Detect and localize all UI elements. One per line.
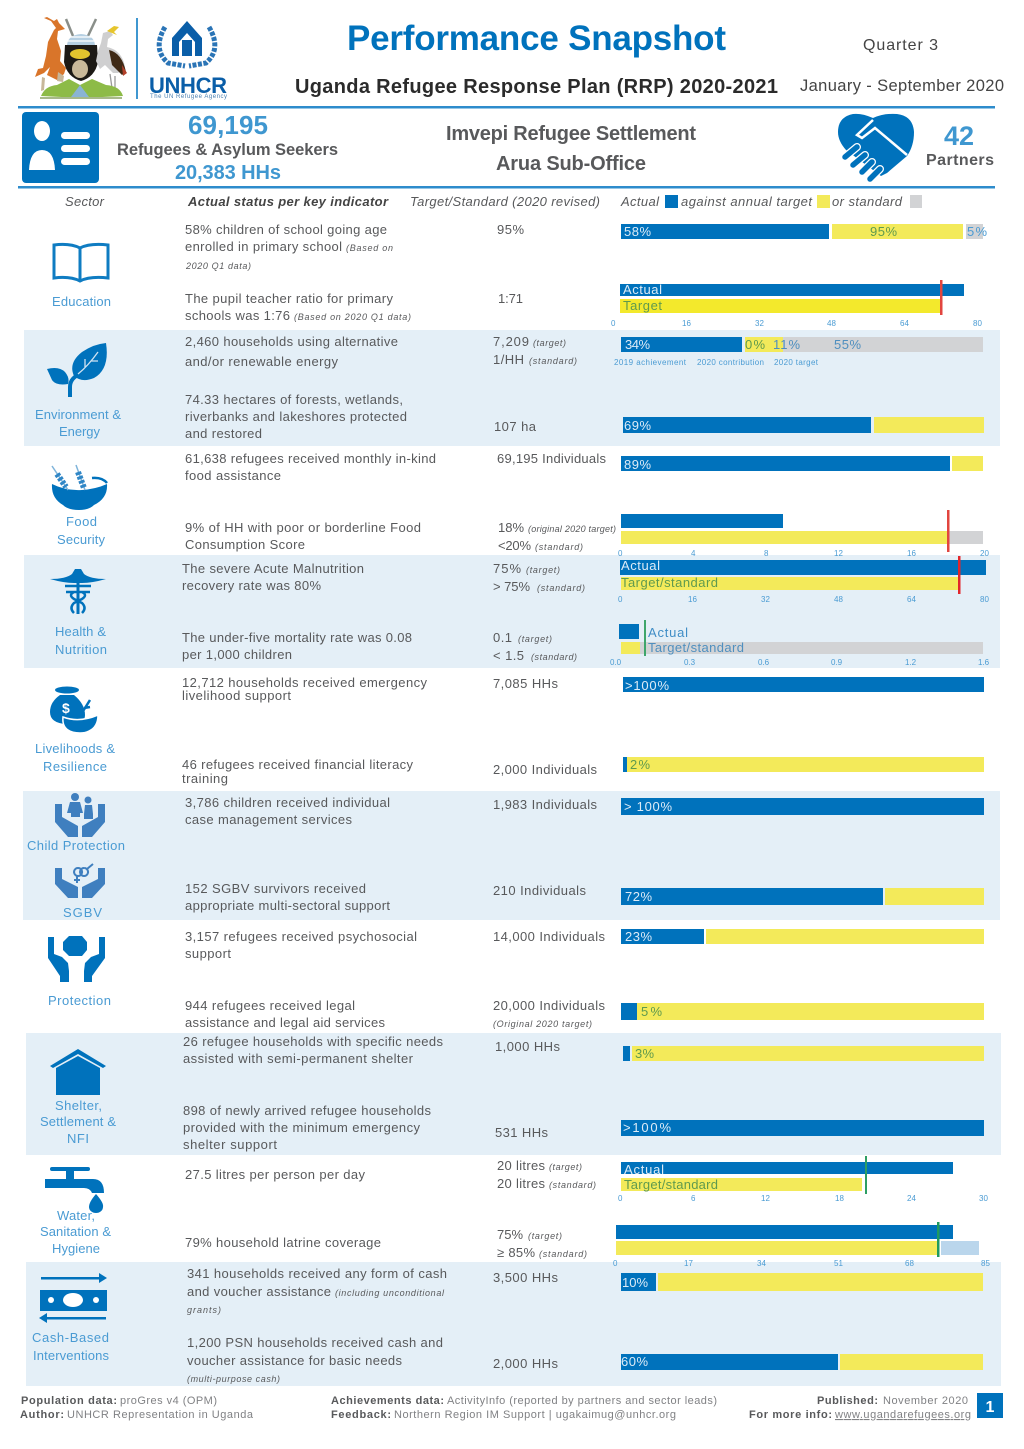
indicator: food consumption score: (original 2020 target)	[528, 524, 616, 534]
indicator: school enrolment: 5%	[967, 224, 987, 239]
indicator: semi-permanent shelter: 3%	[635, 1046, 654, 1061]
indicator: cash and voucher assistance: and voucher assistance	[187, 1284, 331, 1299]
indicator: food consumption score: 16	[907, 549, 916, 558]
indicator: school enrolment: 58%	[624, 224, 651, 239]
icon: hands with gender symbols	[55, 864, 105, 898]
icon: person card	[22, 112, 99, 183]
indicator: emergency shelter: provided with the minimum emergency	[183, 1120, 420, 1135]
indicator: legal assistance	[185, 998, 984, 1030]
indicator: pupil teacher ratio: 16	[682, 319, 691, 328]
panel: Livelihoods and Resilience	[35, 675, 984, 786]
indicator: food assistance: food assistance	[185, 468, 281, 483]
logo: UNHCR	[149, 21, 227, 100]
footer: proGres v4 (OPM)	[120, 1395, 217, 1407]
panel: Shelter, Settlement and NFI: NFI	[67, 1131, 89, 1146]
sector label: Shelter,	[55, 1098, 102, 1113]
indicator: under-five mortality: 0.9	[831, 658, 843, 667]
indicator: child case management: case management services	[185, 812, 352, 827]
indicator: semi-permanent shelter: assisted with semi-permanent shelter	[183, 1051, 414, 1066]
settlement name: Imvepi Refugee Settlement	[446, 123, 696, 145]
icon: money bag and bowl	[50, 686, 98, 733]
footer	[20, 1393, 1003, 1421]
indicator: emergency shelter: >100%	[623, 1120, 671, 1135]
indicator: financial literacy: 2%	[630, 757, 650, 772]
indicator: child case management	[185, 795, 984, 827]
indicator: food assistance: 89%	[624, 457, 651, 472]
indicator: hectares restored: riverbanks and lakeshores protected	[185, 409, 407, 424]
indicator: under-five mortality: 0.3	[684, 658, 696, 667]
sector label: Education	[52, 294, 111, 309]
indicator: latrine coverage: (target)	[528, 1231, 562, 1241]
indicator: under-five mortality: 0.1	[493, 630, 512, 645]
indicator: litres per person: 0	[618, 1194, 623, 1203]
indicator: renewable energy: (standard)	[529, 356, 577, 366]
footer: Achievements data:	[331, 1395, 444, 1407]
indicator: food consumption score: 20	[980, 549, 989, 558]
panel: Cash-Based Interventions	[26, 1262, 1001, 1386]
sector label: Cash-Based	[32, 1330, 109, 1345]
quarter: Quarter 3	[863, 37, 938, 54]
footer: Published:	[817, 1395, 878, 1407]
indicator: semi-permanent shelter: 1,000 HHs	[495, 1039, 560, 1054]
panel: Protection	[48, 929, 984, 1030]
indicator: litres per person: Target/standard	[624, 1177, 718, 1192]
indicator: child case management: > 100%	[624, 799, 672, 814]
footer: Population data:	[21, 1395, 117, 1407]
panel: Food Security	[52, 451, 989, 558]
indicator: PSN cash assistance	[187, 1335, 983, 1384]
indicator: under-five mortality: 0.0	[610, 658, 622, 667]
indicator: litres per person: 6	[691, 1194, 696, 1203]
indicator: food consumption score: 8	[764, 549, 769, 558]
indicator: pupil teacher ratio: schools was 1:76	[185, 308, 290, 323]
indicator: pupil teacher ratio: Actual	[623, 282, 662, 297]
indicator: renewable energy: (target)	[533, 338, 566, 348]
indicator: food consumption score: 18%	[498, 520, 524, 535]
indicator: hectares restored: and restored	[185, 426, 262, 441]
indicator: acute malnutrition recovery: Actual	[621, 558, 660, 573]
panel: header	[18, 17, 1004, 188]
indicator: latrine coverage: 79% household latrine coverage	[185, 1235, 381, 1250]
icon: caduceus	[50, 569, 106, 614]
indicator: acute malnutrition recovery: 32	[761, 595, 770, 604]
indicator: food assistance	[185, 451, 983, 483]
sector label: Water,	[57, 1208, 95, 1223]
sector label: Health &	[55, 624, 106, 639]
indicator: SGBV support: 152 SGBV survivors received	[185, 881, 366, 896]
panel: key figures	[22, 110, 994, 184]
panel: Child Protection and SGBV	[23, 791, 1000, 920]
panel: Cash-Based Interventions: Interventions	[33, 1348, 110, 1363]
footer: www.ugandarefugees.org	[834, 1409, 971, 1421]
indicator: cash and voucher assistance: 3,500 HHs	[493, 1270, 558, 1285]
indicator: PSN cash assistance: 2,000 HHs	[493, 1356, 558, 1371]
indicator: renewable energy: 0%	[745, 337, 765, 352]
indicator: cash and voucher assistance: 341 households received any form of cash	[187, 1266, 447, 1281]
footer: UNHCR Representation in Uganda	[67, 1409, 254, 1421]
indicator: renewable energy: 2,460 households using alternative	[185, 334, 398, 349]
panel: Environment and Energy: Energy	[59, 424, 100, 439]
icon: water tap	[45, 1167, 104, 1213]
table header and legend: or standard	[832, 194, 903, 209]
indicator: litres per person: 24	[907, 1194, 916, 1203]
indicator: emergency livelihood support: 12,712 households received emergency	[182, 675, 428, 690]
indicator: hectares restored: 107 ha	[494, 419, 537, 434]
panel: Food Security: Security	[57, 532, 106, 547]
divider between logos	[136, 18, 138, 99]
indicator: renewable energy: 1/HH	[493, 352, 524, 367]
indicator: emergency shelter: 531 HHs	[495, 1125, 548, 1140]
households count: 20,383 HHs	[175, 162, 281, 184]
panel: Health and Nutrition: Nutrition	[55, 642, 107, 657]
table header and legend: Sector	[65, 194, 105, 209]
indicator: renewable energy: 2020 contribution	[697, 358, 764, 367]
indicator: cash and voucher assistance	[187, 1266, 983, 1315]
panel: Water, Sanitation and Hygiene	[40, 1156, 990, 1268]
indicator: acute malnutrition recovery: 48	[834, 595, 843, 604]
indicator: litres per person: (target)	[549, 1162, 582, 1172]
indicator: acute malnutrition recovery: 64	[907, 595, 916, 604]
indicator: legal assistance: 20,000 Individuals	[493, 998, 606, 1013]
indicator: litres per person: Actual	[624, 1162, 664, 1177]
indicator: psychosocial support: support	[185, 946, 231, 961]
indicator: latrine coverage: (standard)	[539, 1249, 587, 1259]
indicator: legal assistance: 944 refugees received legal	[185, 998, 355, 1013]
indicator: latrine coverage	[185, 1222, 990, 1268]
title: Performance Snapshot	[347, 19, 726, 58]
indicator: under-five mortality: Target/standard	[648, 640, 744, 655]
icon: banknote with arrows	[39, 1273, 107, 1323]
footer: Feedback:	[331, 1409, 391, 1421]
indicator: latrine coverage: 51	[834, 1259, 843, 1268]
sub-office name: Arua Sub-Office	[496, 153, 646, 175]
indicator: acute malnutrition recovery	[182, 556, 989, 604]
indicator: semi-permanent shelter: 26 refugee households with specific needs	[183, 1034, 444, 1049]
icon: money bag and bowl: $	[62, 700, 70, 716]
indicator: cash and voucher assistance: (including unconditional	[335, 1288, 445, 1298]
sector label: SGBV	[63, 905, 102, 920]
indicator: latrine coverage: 34	[757, 1259, 766, 1268]
indicator: litres per person: 20 litres	[497, 1176, 546, 1191]
logo: UNHCR: The UN Refugee Agency	[150, 94, 227, 100]
table header and legend: Target/Standard (2020 revised)	[410, 194, 600, 209]
icon: open book	[54, 244, 108, 281]
indicator: litres per person: 12	[761, 1194, 770, 1203]
indicator: emergency livelihood support: livelihood support	[182, 688, 291, 703]
indicator: school enrolment: (Based on	[346, 243, 393, 253]
indicator: food consumption score: <20%	[498, 538, 531, 553]
logo: Uganda coat of arms	[35, 17, 127, 98]
sector label: Child Protection	[27, 838, 125, 853]
indicator: under-five mortality: 1.2	[905, 658, 917, 667]
indicator: under-five mortality	[182, 620, 990, 667]
indicator: food consumption score	[185, 510, 989, 558]
page number	[977, 1393, 1003, 1418]
indicator: latrine coverage: ≥ 85%	[497, 1245, 535, 1260]
indicator: litres per person	[185, 1156, 988, 1203]
indicator: renewable energy: 34%	[625, 337, 650, 352]
indicator: renewable energy: 11%	[773, 337, 800, 352]
indicator: acute malnutrition recovery: The severe Acute Malnutrition	[182, 561, 364, 576]
indicator: acute malnutrition recovery: (target)	[526, 565, 560, 575]
indicator: cash and voucher assistance: 10%	[622, 1275, 648, 1290]
indicator: school enrolment: 58% children of school going age	[185, 222, 387, 237]
indicator: legal assistance: (Original 2020 target)	[493, 1019, 592, 1029]
refugee label: Refugees & Asylum Seekers	[117, 141, 338, 159]
indicator: acute malnutrition recovery: recovery rate was 80%	[182, 578, 321, 593]
indicator: renewable energy: 55%	[834, 337, 861, 352]
indicator: pupil teacher ratio: 80	[973, 319, 982, 328]
footer: November 2020	[883, 1395, 968, 1407]
indicator: under-five mortality: 0.6	[758, 658, 770, 667]
indicator: legal assistance: 5%	[641, 1004, 662, 1019]
panel: Education	[52, 222, 987, 328]
indicator: under-five mortality: (target)	[518, 634, 552, 644]
indicator: renewable energy: 2020 target	[774, 358, 819, 367]
footer: ActivityInfo (reported by partners and sector leads)	[447, 1395, 717, 1407]
indicator: hectares restored: 74.33 hectares of forests, wetlands,	[185, 392, 403, 407]
indicator: acute malnutrition recovery: Target/standard	[621, 575, 718, 590]
indicator: under-five mortality: < 1.5	[493, 648, 524, 663]
indicator: psychosocial support: 3,157 refugees received psychosocial	[185, 929, 417, 944]
indicator: latrine coverage: 75%	[497, 1227, 523, 1242]
indicator: child case management: 1,983 Individuals	[493, 797, 598, 812]
partner count: 42	[944, 121, 974, 151]
indicator: financial literacy: 2,000 Individuals	[493, 762, 598, 777]
indicator: litres per person: 20 litres	[497, 1158, 546, 1173]
indicator: emergency livelihood support: >100%	[625, 678, 669, 693]
indicator: emergency shelter: shelter support	[183, 1137, 277, 1152]
panel: Water, Sanitation and Hygiene: Sanitation &	[40, 1224, 111, 1239]
indicator: legal assistance: assistance and legal aid services	[185, 1015, 386, 1030]
panel: Livelihoods and Resilience: Resilience	[43, 759, 107, 774]
indicator: school enrolment: 2020 Q1 data)	[185, 261, 251, 271]
panel: Shelter, Settlement and NFI: Settlement &	[40, 1114, 116, 1129]
sector label: Environment &	[35, 407, 121, 422]
icon: bowl with grain	[52, 465, 107, 510]
indicator: litres per person: 27.5 litres per person per day	[185, 1167, 366, 1182]
indicator: PSN cash assistance: 60%	[621, 1354, 648, 1369]
panel: Shelter, Settlement and NFI	[26, 1033, 1001, 1155]
indicator: PSN cash assistance: (multi-purpose cash)	[187, 1374, 280, 1384]
indicator: renewable energy: 2019 achievement	[614, 358, 687, 367]
indicator: pupil teacher ratio: 0	[611, 319, 616, 328]
page number: 1	[986, 1399, 995, 1416]
icon: handshake heart	[838, 114, 914, 179]
sector label: Food	[66, 514, 97, 529]
footer: For more info:	[749, 1409, 832, 1421]
indicator: food consumption score: 4	[691, 549, 696, 558]
indicator: acute malnutrition recovery: 0	[618, 595, 623, 604]
indicator: PSN cash assistance: 1,200 PSN households received cash and	[187, 1335, 443, 1350]
indicator: pupil teacher ratio: 32	[755, 319, 764, 328]
indicator: pupil teacher ratio: (Based on 2020 Q1 data)	[294, 312, 411, 322]
indicator: child case management: 3,786 children received individual	[185, 795, 390, 810]
indicator: psychosocial support: 23%	[625, 929, 652, 944]
indicator: latrine coverage: 17	[684, 1259, 693, 1268]
subtitle: Uganda Refugee Response Plan (RRP) 2020-2021	[295, 76, 778, 98]
indicator: food consumption score: 12	[834, 549, 843, 558]
indicator: food assistance: 61,638 refugees received monthly in-kind	[185, 451, 436, 466]
logo: UNHCR: UNHCR	[149, 73, 227, 98]
indicator: acute malnutrition recovery: 75%	[493, 561, 521, 576]
indicator: pupil teacher ratio: 64	[900, 319, 909, 328]
indicator: food consumption score: (standard)	[535, 542, 583, 552]
indicator: renewable energy	[185, 334, 983, 369]
indicator: psychosocial support	[185, 929, 984, 961]
indicator: financial literacy: training	[182, 771, 228, 786]
indicator: acute malnutrition recovery: 80	[980, 595, 989, 604]
panel: Environment and Energy	[24, 330, 1000, 446]
indicator: hectares restored: 69%	[624, 418, 651, 433]
sector label: Livelihoods &	[35, 741, 115, 756]
indicator: emergency shelter: 898 of newly arrived refugee households	[183, 1103, 432, 1118]
indicator: PSN cash assistance: voucher assistance for basic needs	[187, 1353, 402, 1368]
indicator: acute malnutrition recovery: > 75%	[493, 579, 530, 594]
period: January - September 2020	[800, 77, 1004, 95]
indicator: latrine coverage: 68	[905, 1259, 914, 1268]
indicator: under-five mortality: per 1,000 children	[182, 647, 292, 662]
footer: Northern Region IM Support | ugakaimug@unhcr.org	[394, 1409, 676, 1421]
indicator: food consumption score: Consumption Score	[185, 537, 305, 552]
panel: Health and Nutrition	[24, 555, 1000, 668]
indicator: school enrolment: 95%	[497, 222, 524, 237]
sector label: Protection	[48, 993, 111, 1008]
indicator: financial literacy: 46 refugees received financial literacy	[182, 757, 414, 772]
indicator: renewable energy: and/or renewable energy	[185, 354, 338, 369]
indicator: litres per person: 18	[835, 1194, 844, 1203]
table header and legend: Actual	[620, 194, 660, 209]
indicator: latrine coverage: 0	[613, 1259, 618, 1268]
icon: hands with heart	[48, 936, 105, 982]
indicator: food consumption score: 0	[618, 549, 623, 558]
indicator: litres per person: (standard)	[549, 1180, 596, 1190]
indicator: food assistance: 69,195 Individuals	[497, 451, 606, 466]
indicator: school enrolment: enrolled in primary school	[185, 239, 342, 254]
indicator: emergency livelihood support: 7,085 HHs	[493, 676, 558, 691]
indicator: under-five mortality: The under-five mortality rate was 0.08	[182, 630, 412, 645]
indicator: cash and voucher assistance: grants)	[187, 1305, 221, 1315]
indicator: SGBV support: 210 Individuals	[493, 883, 586, 898]
indicator: litres per person: 30	[979, 1194, 988, 1203]
icon: hands protecting children	[55, 793, 105, 837]
indicator: acute malnutrition recovery: (standard)	[537, 583, 585, 593]
icon: house	[50, 1049, 106, 1095]
indicator: latrine coverage: 85	[981, 1259, 990, 1268]
indicator: emergency livelihood support	[182, 675, 984, 703]
footer: Author:	[20, 1409, 64, 1421]
table header and legend	[65, 194, 922, 209]
indicator: food consumption score: 9% of HH with poor or borderline Food	[185, 520, 421, 535]
indicator: under-five mortality: (standard)	[531, 652, 577, 662]
partner label: Partners	[926, 152, 994, 169]
table header and legend: Actual status per key indicator	[187, 194, 389, 209]
indicator: emergency shelter	[183, 1103, 984, 1152]
indicator: school enrolment: 95%	[870, 224, 897, 239]
indicator: under-five mortality: 1.6	[978, 658, 990, 667]
table header and legend: against annual target	[681, 194, 813, 209]
indicator: SGBV support	[185, 881, 984, 913]
indicator: acute malnutrition recovery: 16	[688, 595, 697, 604]
indicator: school enrolment	[185, 222, 987, 271]
indicator: SGBV support: 72%	[625, 889, 652, 904]
indicator: pupil teacher ratio: The pupil teacher ratio for primary	[185, 291, 394, 306]
indicator: pupil teacher ratio	[185, 280, 982, 328]
indicator: semi-permanent shelter	[183, 1034, 984, 1066]
indicator: SGBV support: appropriate multi-sectoral support	[185, 898, 390, 913]
indicator: financial literacy	[182, 757, 984, 786]
indicator: hectares restored	[185, 392, 984, 441]
indicator: under-five mortality: Actual	[648, 625, 688, 640]
indicator: pupil teacher ratio: Target	[623, 298, 662, 313]
indicator: psychosocial support: 14,000 Individuals	[493, 929, 606, 944]
panel: Water, Sanitation and Hygiene: Hygiene	[52, 1241, 100, 1256]
indicator: pupil teacher ratio: 48	[827, 319, 836, 328]
refugee count: 69,195	[188, 110, 268, 140]
icon: plant	[47, 343, 107, 397]
indicator: pupil teacher ratio: 1:71	[498, 291, 523, 306]
indicator: renewable energy: 7,209	[493, 334, 529, 349]
